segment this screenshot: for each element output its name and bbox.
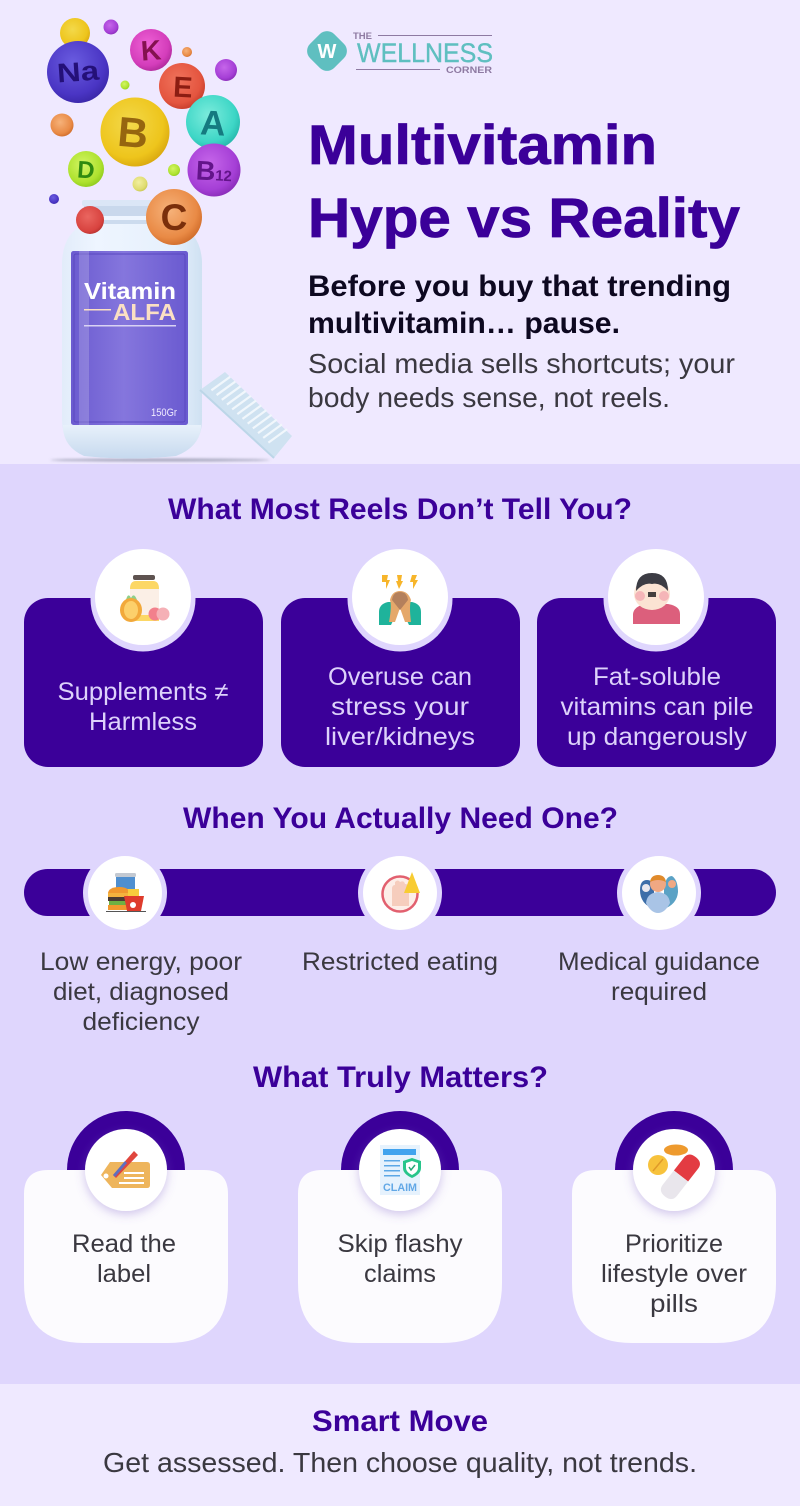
title: Hype vs Reality (308, 186, 740, 249)
panel: fat-soluble: up dangerously (567, 723, 748, 751)
sphere A: A (199, 103, 227, 144)
spheres (49, 18, 237, 204)
logo: The Wellness Corner: THE (353, 31, 372, 41)
panel: supplements: Harmless (89, 708, 197, 736)
icon: label and pen (101, 1151, 150, 1188)
sphere C (146, 189, 202, 245)
text: low energy: Low energy, poor (40, 948, 242, 976)
jar base (63, 425, 201, 458)
logo mark (303, 27, 351, 75)
subtitle: multivitamin… pause. (308, 307, 620, 340)
heading: when you actually need one: When You Actually Need One? (183, 802, 618, 835)
text: low energy: deficiency (82, 1008, 200, 1036)
intro text (308, 348, 735, 413)
sphere B12: B12 (195, 155, 233, 187)
icon: medical team (617, 851, 701, 935)
panel: skip flashy claims: claims (364, 1260, 436, 1288)
panel: overuse: liver/kidneys (325, 723, 475, 751)
icon: supplement jar and fruit (120, 575, 170, 622)
sphere Na: Na (56, 55, 101, 88)
text: medical guidance: Medical guidance (558, 948, 760, 976)
panel: fat-soluble (537, 546, 776, 767)
text: restricted eating: Restricted eating (302, 948, 498, 976)
subtitle: Before you buy that trending (308, 270, 731, 303)
jar shadow (50, 458, 270, 462)
sphere D: D (76, 156, 95, 185)
icon: pills (648, 1144, 703, 1202)
panel: supplements (24, 546, 263, 767)
intro text: Social media sells shortcuts; your (308, 348, 735, 379)
bar: needs timeline (24, 851, 776, 935)
jar label: ALFA (113, 299, 176, 325)
title (308, 113, 740, 249)
panel: skip flashy claims: Skip flashy (338, 1230, 463, 1258)
panel: read the label (24, 1111, 228, 1343)
title: Multivitamin (308, 113, 657, 176)
jar label (71, 251, 188, 425)
jar label: Vitamin (84, 278, 176, 304)
logo: The Wellness Corner: CORNER (446, 65, 493, 75)
icon: puffy faced child (633, 573, 680, 624)
icon: claim document: CLAIM (383, 1182, 417, 1194)
illustration: vitamin jar with spheres (47, 18, 292, 462)
logo mark: W (318, 41, 337, 63)
icon: restricted hand (358, 851, 442, 935)
footer: smart move (0, 1384, 800, 1506)
jar label: 150Gr (151, 407, 177, 419)
intro text: body needs sense, not reels. (308, 382, 670, 413)
footer: smart move: Smart Move (312, 1405, 488, 1438)
sphere Na (47, 41, 109, 103)
sphere E (159, 63, 205, 109)
panel: prioritize lifestyle: lifestyle over (601, 1260, 747, 1288)
sphere K (130, 29, 172, 71)
jar cap (200, 372, 292, 458)
footer: smart move: Get assessed. Then choose quality, not trends. (103, 1447, 697, 1478)
logo: The Wellness Corner: WELLNESS (357, 38, 493, 68)
icon: stressed person (379, 575, 421, 625)
panel: read the label: Read the (72, 1230, 176, 1258)
middle section background (0, 464, 800, 1384)
sphere D (68, 151, 104, 187)
panel: fat-soluble: Fat-soluble (593, 663, 721, 691)
sphere E: E (172, 72, 193, 105)
sphere B: B (116, 108, 150, 157)
jar neck (82, 200, 157, 226)
panel: skip flashy claims (298, 1111, 502, 1343)
subtitle (308, 270, 731, 340)
logo: The Wellness Corner (303, 27, 493, 75)
text: medical guidance (558, 948, 760, 1006)
sphere red (76, 206, 104, 234)
panel: prioritize lifestyle: pills (650, 1290, 698, 1318)
panel: overuse: stress your (331, 693, 469, 721)
sphere C: C (161, 197, 187, 238)
sphere K: K (140, 34, 162, 67)
panel: overuse: Overuse can (328, 663, 472, 691)
panel: overuse (281, 546, 520, 767)
panel: prioritize lifestyle: Prioritize (625, 1230, 723, 1258)
heading: what most reels don't tell you: What Most Reels Don’t Tell You? (168, 493, 632, 526)
text: low energy (40, 948, 242, 1036)
sphere B (100, 98, 170, 166)
icon: claim document (380, 1145, 421, 1195)
sphere A (186, 95, 240, 149)
heading: what truly matters: What Truly Matters? (253, 1061, 548, 1094)
icon: fast food (83, 851, 167, 935)
panel: fat-soluble: vitamins can pile (560, 693, 754, 721)
text: low energy: diet, diagnosed (53, 978, 229, 1006)
panel: prioritize lifestyle (572, 1111, 776, 1343)
text: medical guidance: required (611, 978, 707, 1006)
jar body (62, 224, 202, 458)
panel: supplements: Supplements ≠ (58, 678, 228, 706)
panel: read the label: label (97, 1260, 151, 1288)
sphere B12 (188, 144, 240, 196)
